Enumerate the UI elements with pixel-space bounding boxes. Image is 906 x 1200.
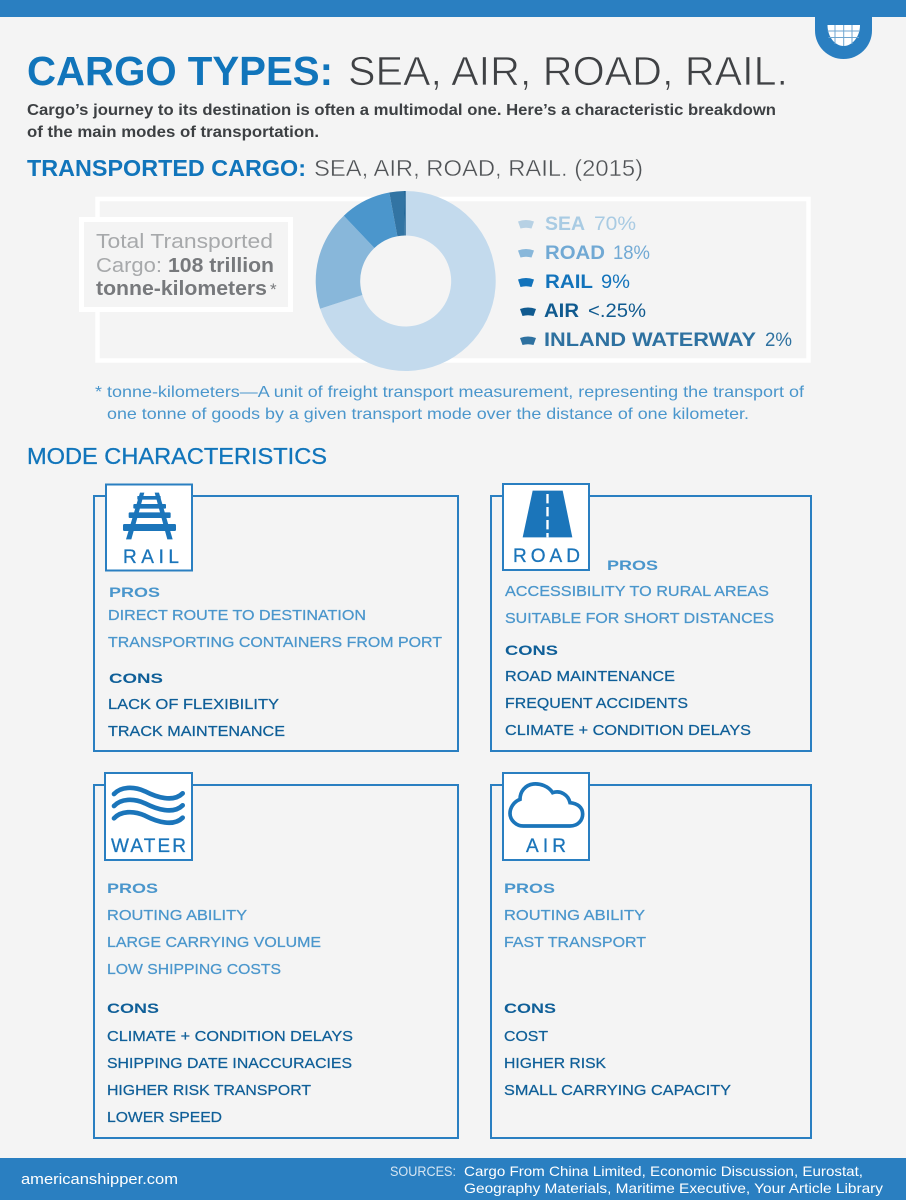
- title: CARGO TYPES:: [27, 48, 333, 94]
- title: [27, 48, 788, 94]
- cons: road: ROAD MAINTENANCE: [505, 668, 675, 685]
- panel: air: [491, 773, 811, 1138]
- icon: road: ROAD: [513, 546, 580, 567]
- heading: transported cargo: SEA, AIR, ROAD, RAIL. (2015): [314, 155, 643, 181]
- legend item: sea: [518, 214, 636, 235]
- panel: water: [94, 773, 458, 1138]
- pros: water: PROS: [107, 880, 158, 896]
- legend item: air: [520, 301, 646, 322]
- legend item: sea: SEA: [545, 214, 585, 235]
- icon: water: [105, 773, 192, 860]
- pros: air: PROS: [504, 880, 555, 896]
- cons: road: [505, 642, 751, 739]
- icon: globe badge: [815, 16, 872, 59]
- callout: total transported cargo: Cargo:: [96, 255, 162, 277]
- pros: water: [107, 880, 321, 978]
- intro text: [27, 102, 776, 141]
- cons: rail: [108, 670, 285, 740]
- legend item: road: [518, 243, 650, 264]
- pros: road: ACCESSIBILITY TO RURAL AREAS: [505, 583, 769, 600]
- legend item: inland waterway: [520, 330, 792, 351]
- icon: water: WATER: [111, 836, 186, 857]
- cons: road: CLIMATE + CONDITION DELAYS: [505, 722, 751, 739]
- donut chart: [316, 191, 496, 371]
- icon: road: [503, 484, 589, 570]
- cons: air: HIGHER RISK: [504, 1055, 606, 1072]
- callout: total transported cargo: Total Transported: [96, 231, 273, 253]
- pros: water: LOW SHIPPING COSTS: [107, 961, 281, 978]
- pros: air: [504, 880, 646, 951]
- legend: [518, 214, 792, 351]
- footer: [0, 1158, 906, 1200]
- footer: Geography Materials, Maritime Executive, Your Article Library: [464, 1180, 883, 1196]
- legend item: air: <.25%: [588, 301, 646, 322]
- icon: air: [503, 773, 589, 860]
- top bar: [0, 0, 906, 17]
- legend item: air: AIR: [544, 301, 579, 322]
- icon: rail: RAIL: [123, 547, 179, 568]
- heading: transported cargo: TRANSPORTED CARGO:: [27, 155, 306, 181]
- icon: air: AIR: [526, 836, 566, 857]
- cons: rail: TRACK MAINTENANCE: [108, 723, 285, 740]
- callout: total transported cargo: [82, 220, 290, 310]
- panel: road: [491, 484, 811, 751]
- cons: water: CONS: [107, 1000, 159, 1016]
- pros: air: ROUTING ABILITY: [504, 907, 645, 924]
- pros: rail: PROS: [109, 584, 160, 600]
- title: SEA, AIR, ROAD, RAIL.: [348, 48, 788, 94]
- cons: air: COST: [504, 1028, 548, 1045]
- legend item: inland waterway: INLAND WATERWAY: [544, 330, 756, 351]
- intro text: of the main modes of transportation.: [27, 124, 319, 141]
- legend item: rail: [518, 272, 630, 293]
- pros: rail: DIRECT ROUTE TO DESTINATION: [108, 607, 366, 624]
- cons: water: [107, 1000, 353, 1126]
- footnote: [95, 384, 805, 423]
- pros: water: ROUTING ABILITY: [107, 907, 247, 924]
- icon: rail: [106, 484, 192, 570]
- pros: rail: TRANSPORTING CONTAINERS FROM PORT: [108, 634, 442, 651]
- cons: road: FREQUENT ACCIDENTS: [505, 695, 688, 712]
- footer: SOURCES:: [390, 1163, 456, 1179]
- heading: transported cargo: [27, 155, 643, 181]
- legend item: rail: 9%: [601, 272, 630, 293]
- cons: water: LOWER SPEED: [107, 1109, 222, 1126]
- cons: water: SHIPPING DATE INACCURACIES: [107, 1055, 352, 1072]
- cons: rail: CONS: [109, 670, 163, 686]
- cons: water: CLIMATE + CONDITION DELAYS: [107, 1028, 353, 1045]
- cons: water: HIGHER RISK TRANSPORT: [107, 1082, 311, 1099]
- footer: americanshipper.com: [21, 1171, 178, 1188]
- pros: road: PROS: [607, 557, 658, 573]
- cons: air: [504, 1000, 731, 1099]
- callout: total transported cargo: 108 trillion: [168, 255, 274, 277]
- intro text: Cargo’s journey to its destination is often a multimodal one. Here’s a characteristic breakdown: [27, 102, 776, 119]
- legend item: inland waterway: 2%: [765, 330, 792, 351]
- legend item: road: 18%: [613, 243, 650, 264]
- cons: air: CONS: [504, 1000, 556, 1016]
- pros: water: LARGE CARRYING VOLUME: [107, 934, 321, 951]
- footnote: one tonne of goods by a given transport mode over the distance of one kilometer.: [107, 406, 749, 423]
- cons: rail: LACK OF FLEXIBILITY: [108, 696, 279, 713]
- legend item: rail: RAIL: [545, 272, 593, 293]
- pros: air: FAST TRANSPORT: [504, 934, 646, 951]
- footnote: * tonne-kilometers—A unit of freight transport measurement, representing the transport of: [95, 384, 805, 401]
- pros: rail: [108, 584, 442, 651]
- panel: chart frame: [98, 199, 808, 360]
- panel: rail: [94, 484, 458, 751]
- cons: air: SMALL CARRYING CAPACITY: [504, 1082, 731, 1099]
- footer: Cargo From China Limited, Economic Discussion, Eurostat,: [464, 1163, 863, 1179]
- callout: total transported cargo: tonne-kilometers: [96, 278, 267, 300]
- heading: mode characteristics: MODE CHARACTERISTICS: [27, 443, 327, 469]
- legend item: sea: 70%: [594, 214, 636, 235]
- callout: total transported cargo: *: [270, 280, 277, 299]
- cons: road: CONS: [505, 642, 558, 658]
- pros: road: SUITABLE FOR SHORT DISTANCES: [505, 610, 774, 627]
- pros: road: [505, 557, 774, 627]
- legend item: road: ROAD: [545, 243, 605, 264]
